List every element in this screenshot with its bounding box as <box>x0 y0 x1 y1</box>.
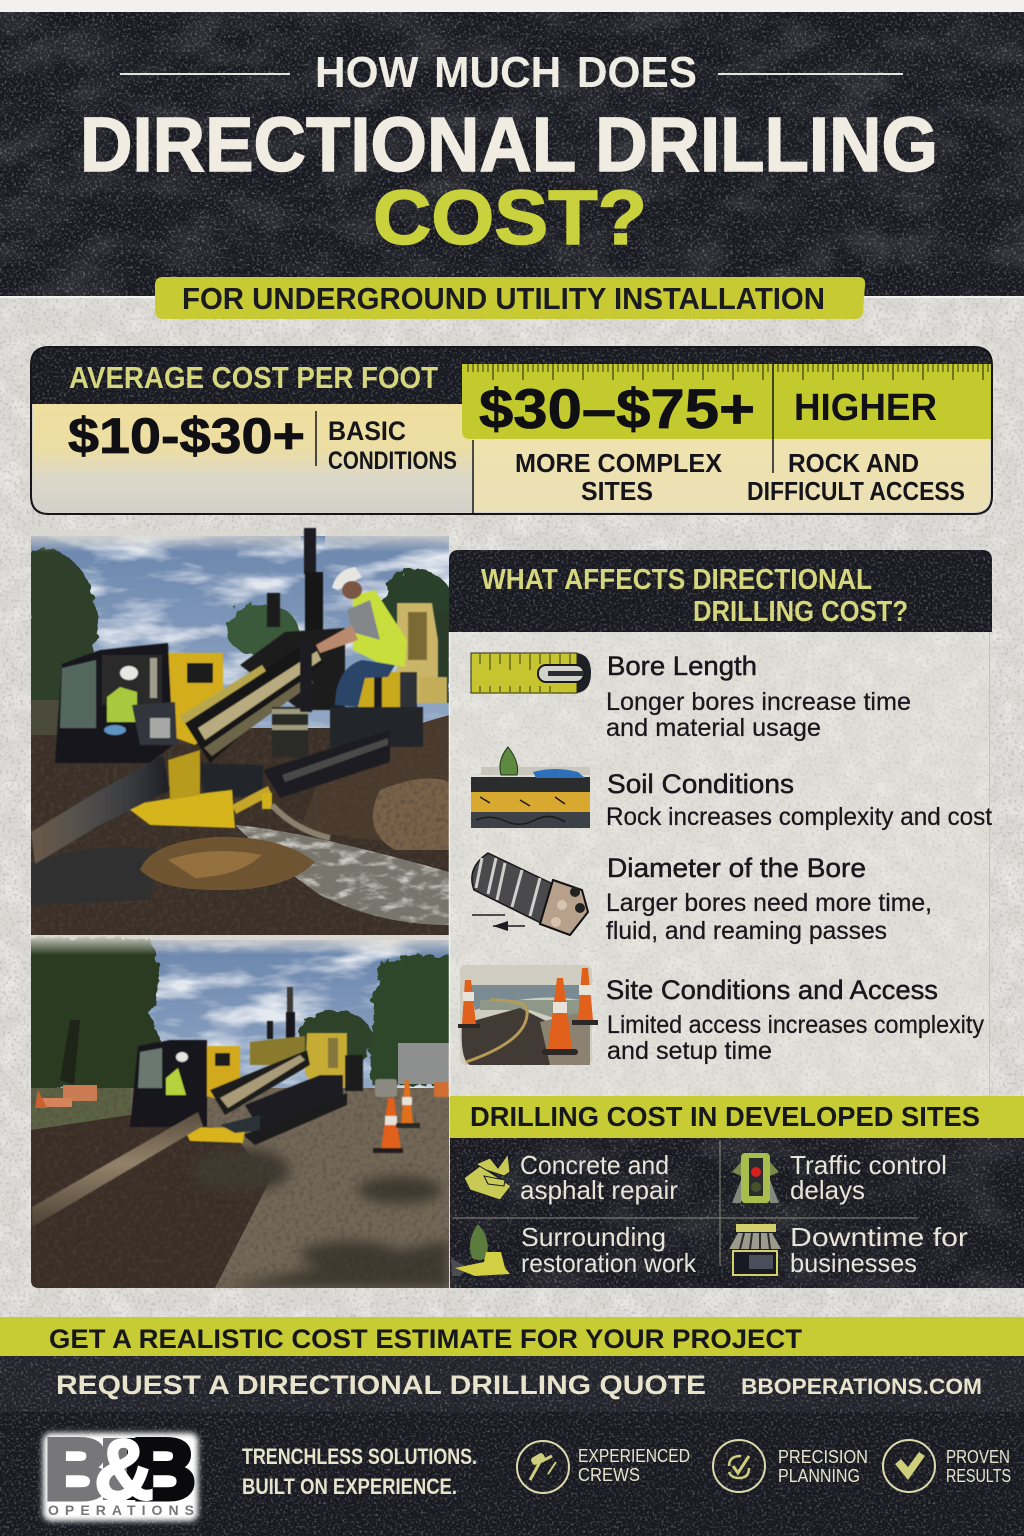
logo: B&B Operations: B <box>44 1422 110 1518</box>
item: downtime for businesses: Downtime for <box>790 1222 968 1252</box>
call to action: quote request <box>56 1370 982 1400</box>
item: surrounding restoration work: Surrounding <box>521 1222 666 1252</box>
logo: B&B Operations: & <box>94 1422 154 1518</box>
item: diameter of the bore: Diameter of the Bore <box>607 853 866 883</box>
item: downtime for businesses: businesses <box>790 1248 917 1278</box>
badge: experienced crews: CREWS <box>578 1465 640 1485</box>
icon: drill bit <box>472 853 588 935</box>
panel heading <box>449 550 992 632</box>
item: site conditions and access <box>606 975 984 1065</box>
tape measure band <box>462 364 992 473</box>
item: diameter of the bore: Larger bores need more time, <box>606 889 932 917</box>
item: bore length: Bore Length <box>607 651 757 681</box>
item: traffic control delays <box>790 1150 947 1205</box>
logo: B&B Operations: B <box>132 1422 196 1518</box>
panel: average cost per foot <box>31 347 992 514</box>
icon: site conditions cones <box>458 965 598 1065</box>
item: soil conditions: Soil Conditions <box>607 769 794 799</box>
panel: what affects cost <box>449 550 992 1097</box>
photo: drilling rig close-up with operators <box>26 528 456 935</box>
item: site conditions and access: Site Conditions and Access <box>606 975 938 1005</box>
item: diameter of the bore <box>606 853 932 945</box>
header strip: AVERAGE COST PER FOOT <box>69 360 438 395</box>
item: bore length <box>606 651 911 742</box>
item: diameter of the bore: fluid, and reaming passes <box>606 917 887 945</box>
icon: traffic light <box>732 1153 779 1203</box>
item: bore length: and material usage <box>606 714 821 742</box>
badge: proven results <box>883 1440 1011 1492</box>
cost cell: basic conditions <box>33 404 474 512</box>
cost cell: complex sites and rock: DIFFICULT ACCESS <box>747 476 965 506</box>
item: surrounding restoration work: restoration work <box>521 1248 697 1278</box>
icon: storefront <box>729 1224 781 1275</box>
icon: tape measure <box>471 653 591 693</box>
title: HOW MUCH DOES <box>315 48 697 97</box>
cost cell: complex sites and rock: MORE COMPLEX <box>515 448 723 478</box>
panel heading: DRILLING COST? <box>693 596 908 628</box>
header strip <box>31 347 992 404</box>
header: dark banner <box>0 12 1024 296</box>
item: site conditions and access: and setup time <box>607 1037 772 1065</box>
tagline: TRENCHLESS SOLUTIONS. <box>242 1444 477 1469</box>
title: COST? <box>373 175 647 261</box>
panel heading: WHAT AFFECTS DIRECTIONAL <box>481 564 872 596</box>
badge: precision planning: PRECISION <box>778 1447 868 1467</box>
tape measure band: HIGHER <box>794 387 937 429</box>
badge: experienced crews: EXPERIENCED <box>578 1446 690 1466</box>
tape measure band: $30–$75+ <box>479 377 755 440</box>
item: concrete and asphalt repair: asphalt repair <box>520 1175 678 1205</box>
title <box>80 48 938 261</box>
title: DIRECTIONAL DRILLING <box>80 102 938 188</box>
panel banner: DRILLING COST IN DEVELOPED SITES <box>470 1101 980 1132</box>
item: concrete and asphalt repair <box>520 1150 678 1205</box>
cost cell: basic conditions: BASIC <box>328 416 406 446</box>
item: soil conditions <box>606 769 992 831</box>
subtitle ribbon: FOR UNDERGROUND UTILITY INSTALLATION <box>182 281 825 316</box>
call to action: yellow estimate band: GET A REALISTIC COST ESTIMATE FOR YOUR PROJECT <box>49 1324 803 1354</box>
badge: proven results: PROVEN <box>946 1447 1010 1467</box>
badge: precision planning <box>713 1440 868 1492</box>
cost cell: complex sites and rock <box>473 438 990 514</box>
call to action: quote request: BBOPERATIONS.COM <box>741 1374 982 1399</box>
item: downtime for businesses <box>790 1222 968 1278</box>
panel banner <box>450 1096 1024 1138</box>
item: soil conditions: Rock increases complexity and cost <box>606 803 992 831</box>
logo: B&B Operations: OPERATIONS <box>48 1502 194 1518</box>
tagline: BUILT ON EXPERIENCE. <box>242 1474 457 1499</box>
footer background <box>0 1356 1024 1536</box>
item: traffic control delays: delays <box>790 1175 865 1205</box>
item: surrounding restoration work <box>521 1222 697 1278</box>
logo: B&B Operations <box>43 1422 198 1521</box>
badge: experienced crews <box>517 1441 690 1493</box>
photo: drilling rig wide site view <box>26 935 455 1288</box>
badge: precision planning: PLANNING <box>778 1466 860 1486</box>
call to action: yellow estimate band <box>0 1317 1024 1356</box>
cost cell: basic conditions: $10-$30+ <box>68 408 305 464</box>
item: bore length: Longer bores increase time <box>606 688 911 716</box>
panel: drilling cost in developed sites <box>450 1096 1024 1288</box>
icon: soil layers <box>471 747 590 828</box>
cost cell: basic conditions: CONDITIONS <box>328 447 457 475</box>
cost cell: complex sites and rock: ROCK AND <box>788 448 919 478</box>
item: site conditions and access: Limited access increases complexity <box>607 1011 984 1039</box>
tagline <box>242 1444 477 1499</box>
item: concrete and asphalt repair: Concrete and <box>520 1150 669 1180</box>
icon: concrete and asphalt <box>464 1154 511 1200</box>
cost cell: complex sites and rock: SITES <box>581 476 653 506</box>
icon: leaf and debris <box>451 1224 510 1276</box>
call to action: quote request: REQUEST A DIRECTIONAL DRILLING QUOTE <box>56 1370 706 1400</box>
item: traffic control delays: Traffic control <box>790 1150 947 1180</box>
